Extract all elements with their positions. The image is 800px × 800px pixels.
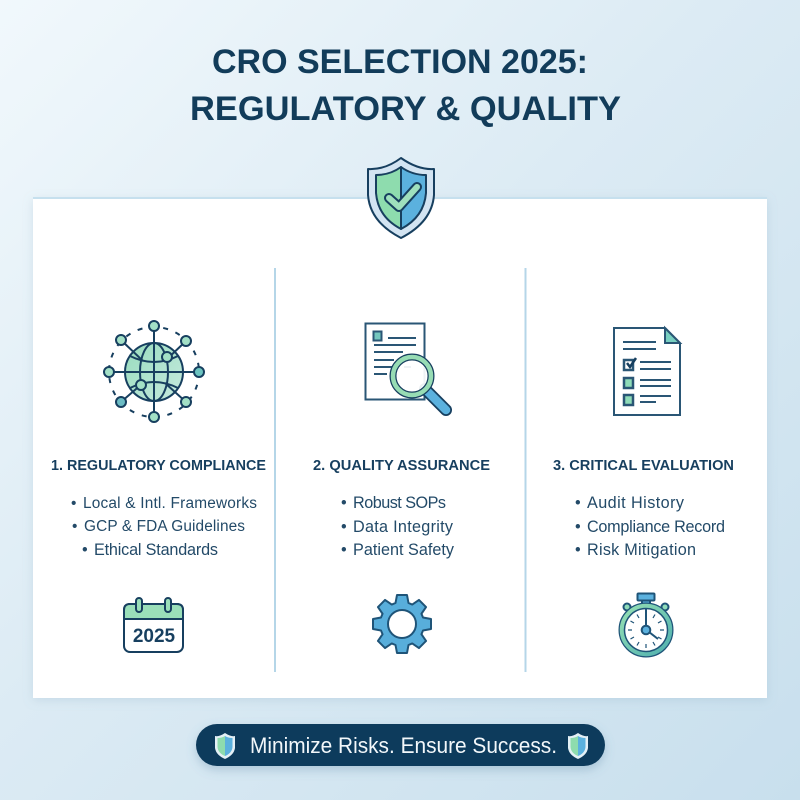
icon: checklist document (614, 328, 680, 415)
icon: small shield left (215, 733, 235, 759)
list: quality items: • (341, 541, 347, 559)
banner: tagline pill (196, 724, 605, 766)
heading: critical evaluation: 3. CRITICAL EVALUATION (553, 458, 734, 474)
list: quality items (341, 494, 455, 559)
divider right (524, 268, 526, 672)
icon: calendar 2025 (124, 598, 183, 652)
icon: gear (373, 595, 431, 653)
list: regulatory items: • (71, 495, 76, 512)
list: quality items: • (341, 494, 347, 512)
list: regulatory items: Local & Intl. Frameworks (83, 495, 257, 512)
list: regulatory items (71, 495, 257, 559)
panel: quality assurance (313, 324, 490, 653)
list: regulatory items: Ethical Standards (94, 541, 218, 559)
list: quality items: Robust SOPs (353, 494, 446, 512)
icon: calendar 2025: 2025 (133, 626, 176, 647)
panel: main card (33, 198, 767, 698)
list: evaluation items: Audit History (587, 494, 685, 512)
icon: stopwatch (620, 594, 672, 656)
heading: quality assurance: 2. QUALITY ASSURANCE (313, 458, 490, 474)
list: evaluation items (575, 494, 725, 559)
list: evaluation items: • (575, 518, 581, 536)
list: regulatory items: • (72, 518, 77, 535)
list: regulatory items: • (82, 541, 88, 559)
icon: small shield right (568, 733, 588, 759)
panel: critical evaluation (553, 328, 734, 656)
title: REGULATORY & QUALITY (190, 90, 621, 128)
list: quality items: • (341, 518, 347, 536)
list: evaluation items: • (575, 494, 581, 512)
divider left (274, 268, 276, 672)
list: evaluation items: Compliance Record (587, 518, 725, 536)
heading: regulatory compliance: 1. REGULATORY COMPLIANCE (51, 458, 266, 474)
list: regulatory items: GCP & FDA Guidelines (84, 518, 245, 535)
list: quality items: Patient Safety (353, 541, 455, 559)
tagline text: Minimize Risks. Ensure Success. (250, 733, 557, 758)
title: CRO SELECTION 2025: (212, 43, 588, 81)
title (190, 43, 621, 128)
list: evaluation items: • (575, 541, 581, 559)
panel: regulatory compliance (51, 321, 266, 652)
icon: globe network (104, 321, 204, 422)
list: quality items: Data Integrity (353, 518, 454, 536)
icon: main shield (368, 158, 434, 238)
icon: document with magnifier (366, 324, 446, 410)
list: evaluation items: Risk Mitigation (587, 541, 696, 559)
